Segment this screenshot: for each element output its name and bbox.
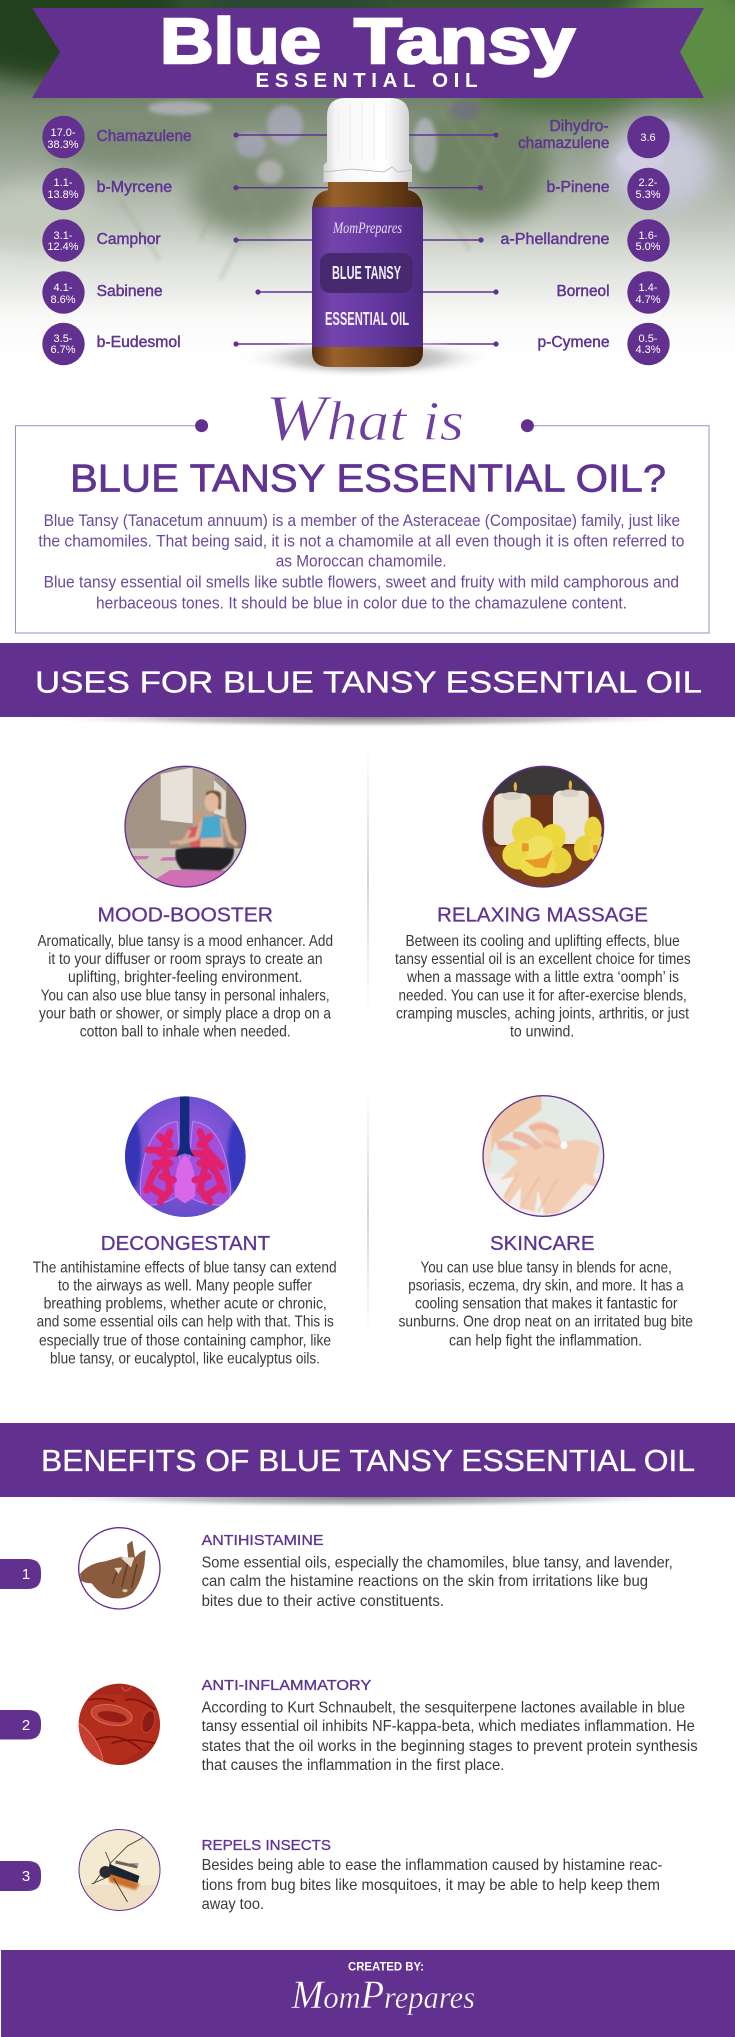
band: benefits heading: BENEFITS OF BLUE TANSY ESSENTIAL OIL [41, 1443, 695, 1478]
body text [202, 1554, 673, 1610]
footer logo: MomPrepares [291, 1972, 475, 2017]
body text [395, 933, 691, 1041]
constituents left: b-Eudesmol [97, 334, 181, 351]
body text: tions from bug bites like mosquitoes, it may be able to help keep them [202, 1877, 660, 1894]
constituents right [500, 116, 670, 365]
what is paragraph: Blue tansy essential oil smells like subtle flowers, sweet and fruity with mild camphorous and [44, 572, 679, 591]
band: uses heading: USES FOR BLUE TANSY ESSENTIAL OIL [35, 665, 702, 700]
constituents left: 13.8% [47, 189, 79, 201]
dividers [367, 745, 369, 1015]
body text: sunburns. One drop neat on an irritated bug bite [398, 1314, 693, 1331]
constituents right: 5.3% [635, 189, 661, 201]
body text: cramping muscles, aching joints, arthritis, or just [396, 1006, 689, 1023]
constituents right: b-Pinene [546, 179, 610, 196]
constituents left: Chamazulene [97, 128, 192, 145]
heading: SKINCARE [490, 1233, 594, 1255]
body text: bites due to their active constituents. [202, 1593, 444, 1610]
constituents left: 12.4% [47, 241, 79, 253]
body text: psoriasis, eczema, dry skin, and more. It has a [408, 1278, 684, 1295]
number tab [0, 1559, 41, 1589]
heading: RELAXING MASSAGE [437, 905, 648, 927]
photo: hands [482, 1095, 604, 1217]
photo: mosquito [78, 1829, 160, 1911]
panel: mood booster [38, 760, 333, 1041]
what is paragraph [38, 511, 684, 613]
photo: yoga [124, 766, 246, 888]
number tab [0, 1861, 41, 1891]
body text: your bath or shower, or simply place a drop on a [39, 1006, 331, 1023]
body text: needed. You can use it for after-exercise blends, [398, 988, 687, 1005]
panel: relaxing massage [395, 760, 691, 1041]
constituents right: chamazulene [518, 135, 609, 152]
constituents right: a-Phellandrene [500, 231, 610, 248]
constituents right: p-Cymene [538, 334, 610, 351]
heading: ANTIHISTAMINE [202, 1533, 324, 1549]
bottle brand: MomPrepares [332, 220, 402, 237]
body text: it to your diffuser or room sprays to create an [48, 951, 323, 968]
photo: lungs [124, 1096, 246, 1217]
constituents left: 4.1- [54, 282, 73, 294]
constituents right: 4.7% [635, 294, 661, 306]
constituents left: 3.5- [54, 333, 73, 345]
constituents left: 17.0- [50, 127, 76, 139]
constituents left: 3.1- [54, 230, 73, 242]
constituents right: 1.6- [639, 230, 658, 242]
constituents left: 38.3% [47, 139, 79, 151]
what is paragraph: as Moroccan chamomile. [276, 552, 447, 571]
heading: MOOD-BOOSTER [98, 905, 273, 927]
connector lines [233, 132, 499, 347]
body text: Some essential oils, especially the chamomiles, blue tansy, and lavender, [202, 1554, 673, 1571]
body text: states that the oil works in the beginning stages to prevent protein synthesis [202, 1738, 698, 1755]
body text: uplifting, brighter-feeling environment. [68, 969, 302, 986]
script heading: What is [265, 382, 464, 455]
body text: can help fight the inflammation. [449, 1333, 642, 1350]
band: benefits heading [0, 1423, 735, 1508]
what is heading: BLUE TANSY ESSENTIAL OIL? [70, 458, 666, 501]
subtitle: ESSENTIAL OIL [256, 69, 478, 92]
body text: and some essential oils can help with that. This is [37, 1314, 334, 1331]
body text [398, 1260, 693, 1350]
body text: blue tansy, or eucalyptol, like eucalyptus oils. [50, 1351, 320, 1368]
constituents right: 0.5- [639, 333, 658, 345]
bottle label line two: ESSENTIAL OIL [325, 309, 409, 329]
title banner [32, 5, 704, 98]
constituents right: Dihydro- [550, 118, 608, 135]
constituents right: 3.6 [640, 132, 656, 144]
body text [38, 933, 333, 1041]
constituents left: Sabinene [97, 283, 163, 300]
body text: According to Kurt Schnaubelt, the sesquiterpene lactones available in blue [202, 1699, 685, 1716]
body text: to the airways as well. Many people suffer [58, 1278, 313, 1295]
constituents right: 2.2- [639, 177, 658, 189]
benefit 1: antihistamine [0, 1524, 673, 1614]
what is paragraph: Blue Tansy (Tanacetum annuum) is a member of the Asteraceae (Compositae) family, just like [44, 511, 680, 530]
body text: You can also use blue tansy in personal inhalers, [41, 988, 330, 1005]
body text: Aromatically, blue tansy is a mood enhancer. Add [38, 933, 333, 950]
title text: Blue [160, 5, 321, 77]
body text: when a massage with a little extra ‘oomph’ is [406, 969, 679, 986]
body text: that causes the inflammation in the first place. [202, 1757, 504, 1774]
constituents left: 1.1- [54, 177, 73, 189]
heading: ANTI-INFLAMMATORY [202, 1678, 372, 1694]
constituents left: 8.6% [50, 294, 76, 306]
panel: skincare [398, 1090, 693, 1350]
panel: decongestant [33, 1090, 337, 1368]
title text [160, 5, 575, 77]
number tab: 1 [22, 1566, 30, 1583]
header photo: blue tansy foliage [0, 0, 735, 316]
photo: red blood cells [78, 1684, 160, 1765]
body text: Between its cooling and uplifting effects, blue [406, 933, 680, 950]
constituents left: 6.7% [50, 344, 76, 356]
photo: hand [78, 1527, 161, 1610]
body text: The antihistamine effects of blue tansy can extend [33, 1260, 337, 1277]
number tab: 3 [22, 1868, 30, 1885]
body text: You can use blue tansy in blends for acne, [420, 1260, 672, 1277]
body text: especially true of those containing camphor, like [39, 1333, 331, 1350]
number tab: 2 [22, 1717, 30, 1734]
what is paragraph: herbaceous tones. It should be blue in color due to the chamazulene content. [96, 594, 627, 613]
constituents right: 1.4- [639, 282, 658, 294]
body text: cooling sensation that makes it fantastic for [415, 1296, 678, 1313]
body text: Besides being able to ease the inflammation caused by histamine reac- [202, 1857, 662, 1874]
constituents right: Borneol [556, 283, 610, 300]
body text [33, 1260, 337, 1368]
body text [202, 1857, 662, 1913]
band: uses heading [0, 643, 735, 728]
constituents right: 5.0% [635, 241, 661, 253]
footer [1, 1950, 735, 2037]
what is paragraph: the chamomiles. That being said, it is not a chamomile at all even though it is often referred to [38, 532, 684, 551]
number tab [0, 1710, 41, 1740]
body text: breathing problems, whether acute or chronic, [44, 1296, 327, 1313]
panel: what is [16, 382, 709, 633]
bottle label line one: BLUE TANSY [332, 263, 401, 283]
benefit 2: anti-inflammatory [0, 1678, 698, 1774]
body text: tansy essential oil is an excellent choice for times [395, 951, 691, 968]
body text [202, 1699, 698, 1774]
constituents right: 4.3% [635, 344, 661, 356]
footer credit: CREATED BY: [348, 1960, 424, 1974]
body text: to unwind. [510, 1024, 574, 1041]
heading: REPELS INSECTS [202, 1838, 331, 1854]
bottle [242, 98, 492, 378]
constituents left: b-Myrcene [97, 179, 172, 196]
body text: cotton ball to inhale when needed. [80, 1024, 291, 1041]
photo: candles [482, 766, 604, 888]
body text: away too. [202, 1896, 264, 1913]
benefit 3: repels insects [0, 1829, 662, 1913]
body text: can calm the histamine reactions on the skin from irritations like bug [202, 1573, 648, 1590]
constituents left: Camphor [97, 231, 161, 248]
heading: DECONGESTANT [101, 1233, 270, 1255]
constituents left [42, 116, 192, 365]
title text: Tansy [354, 5, 575, 77]
body text: tansy essential oil inhibits NF-kappa-beta, which mediates inflammation. He [202, 1718, 695, 1735]
